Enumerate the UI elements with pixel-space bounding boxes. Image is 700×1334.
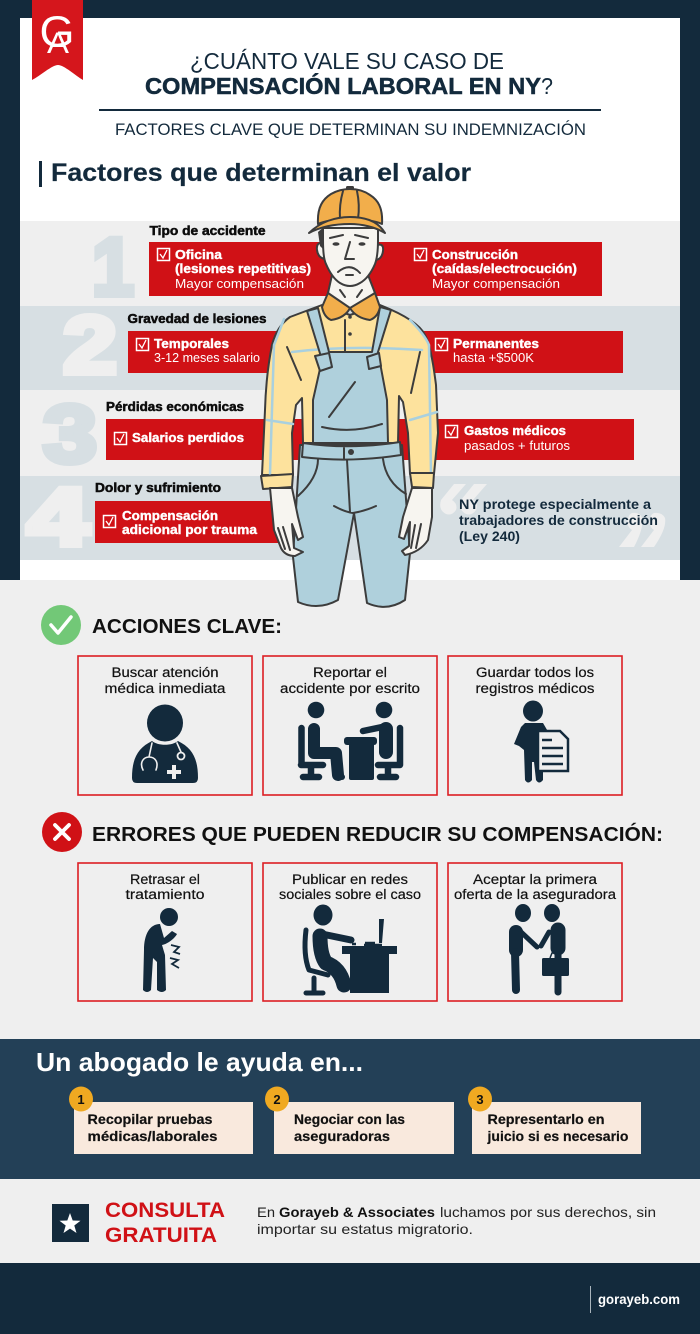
- section heading: factores: Factores que determinan el valor: [51, 159, 471, 187]
- factor 2: gravedad de lesiones: Gravedad de lesiones: [128, 312, 267, 326]
- step 3: 3: [476, 1092, 484, 1107]
- text: gorayeb and associates: Gorayeb & Associates: [279, 1204, 435, 1220]
- icon: closing quotation mark: [619, 513, 665, 547]
- logo ribbon: G: [40, 8, 74, 56]
- action card: atención médica: Buscar atención: [112, 665, 218, 680]
- callout: ley 240: [459, 497, 658, 544]
- error card: redes sociales: sociales sobre el caso: [279, 887, 421, 902]
- factor 2: gravedad de lesiones: [128, 312, 623, 373]
- big number 3: 3: [43, 389, 97, 480]
- factor 1: tipo de accidente: (lesiones repetitivas): [175, 261, 311, 276]
- callout: ley 240: NY protege especialmente a: [459, 497, 652, 512]
- action card: reportar accidente: [263, 656, 437, 795]
- big number 1: 1: [92, 222, 134, 313]
- icon: opening quotation mark: [440, 484, 487, 514]
- error card: retrasar tratamiento: tratamiento: [126, 887, 204, 902]
- callout: ley 240: trabajadores de construcción: [459, 513, 658, 528]
- big number 4: 4: [27, 472, 90, 563]
- factor 1: tipo de accidente: Construcción: [432, 247, 518, 262]
- heading: acciones clave: ACCIONES CLAVE:: [92, 616, 282, 638]
- illustration: injured construction worker: [261, 186, 438, 607]
- step 2: Negociar con las: [294, 1112, 405, 1127]
- factor 2: gravedad de lesiones: 3-12 meses salario: [154, 350, 260, 365]
- action card: registros médicos: Guardar todos los: [476, 665, 594, 680]
- text: gorayeb and associates: luchamos por sus derechos, sin: [440, 1204, 656, 1220]
- heading: consulta gratuita: CONSULTA: [105, 1199, 225, 1222]
- title: ¿CUÁNTO VALE SU CASO DE: [190, 48, 504, 74]
- text: gorayeb and associates: importar su estatus migratorio.: [257, 1221, 473, 1237]
- factor 1: tipo de accidente: Tipo de accidente: [150, 224, 266, 238]
- step 3: [468, 1086, 641, 1154]
- footer: [0, 1263, 700, 1334]
- title: [145, 48, 553, 99]
- heading: consulta gratuita: GRATUITA: [105, 1224, 217, 1247]
- action card: reportar accidente: accidente por escrito: [280, 681, 420, 696]
- action card: reportar accidente: Reportar el: [313, 665, 387, 680]
- logo ribbon: A: [47, 27, 69, 60]
- factor 2: gravedad de lesiones: Permanentes: [453, 336, 539, 351]
- footer: gorayeb.com: [598, 1292, 680, 1307]
- action card: atención médica: [78, 656, 252, 795]
- heading: un abogado le ayuda: Un abogado le ayuda en...: [36, 1047, 363, 1077]
- step 2: [265, 1086, 454, 1154]
- action card: registros médicos: [448, 656, 622, 795]
- action card: atención médica: médica inmediata: [104, 681, 226, 696]
- factor 3: pérdidas económicas: [106, 400, 634, 460]
- error card: retrasar tratamiento: Retrasar el: [130, 872, 200, 887]
- step 3: juicio si es necesario: [486, 1129, 628, 1144]
- factor 4: dolor y sufrimiento: Compensación: [122, 508, 218, 523]
- action card: registros médicos: registros médicos: [476, 681, 595, 696]
- error card: primera oferta: oferta de la aseguradora: [454, 887, 617, 902]
- factor 1: tipo de accidente: Oficina: [175, 247, 223, 262]
- error card: primera oferta: Aceptar la primera: [473, 872, 598, 887]
- error card: redes sociales: Publicar en redes: [292, 872, 408, 887]
- title: COMPENSACIÓN LABORAL EN NY: [145, 72, 541, 99]
- big number 2: 2: [63, 300, 117, 391]
- subtitle: FACTORES CLAVE QUE DETERMINAN SU INDEMNIZACIÓN: [115, 120, 586, 139]
- factor 1: tipo de accidente: (caídas/electrocución): [432, 261, 577, 276]
- factor 1: tipo de accidente: Mayor compensación: [432, 276, 560, 291]
- factor 3: pérdidas económicas: Pérdidas económicas: [106, 400, 244, 414]
- factor 3: pérdidas económicas: Salarios perdidos: [132, 430, 244, 445]
- heading: consulta gratuita: [105, 1199, 225, 1247]
- step 2: 2: [273, 1092, 281, 1107]
- factor 3: pérdidas económicas: pasados + futuros: [464, 438, 570, 453]
- factor bands: [20, 221, 680, 560]
- logo ribbon: [32, 0, 83, 80]
- heading: errores: ERRORES QUE PUEDEN REDUCIR SU COMPENSACIÓN:: [92, 822, 663, 846]
- error card: primera oferta: [448, 863, 622, 1001]
- factor 1: tipo de accidente: Mayor compensación: [175, 276, 304, 291]
- factor 4: dolor y sufrimiento: [95, 481, 285, 543]
- step 3: Representarlo en: [488, 1112, 604, 1127]
- text: gorayeb and associates: [257, 1204, 656, 1237]
- factor 3: pérdidas económicas: Gastos médicos: [464, 423, 566, 438]
- icon: star box: [52, 1204, 89, 1242]
- step 1: Recopilar pruebas: [88, 1112, 212, 1127]
- error card: retrasar tratamiento: [78, 863, 252, 1001]
- step 1: médicas/laborales: [88, 1129, 218, 1144]
- title: ?: [541, 73, 553, 99]
- callout: ley 240: (Ley 240): [459, 529, 520, 544]
- header panel: [0, 0, 700, 580]
- check badge: [41, 605, 81, 645]
- factor 1: tipo de accidente: [149, 224, 602, 296]
- error card: redes sociales: [263, 863, 437, 1001]
- step 1: 1: [77, 1092, 85, 1107]
- step 1: [69, 1086, 253, 1154]
- factor 4: dolor y sufrimiento: Dolor y sufrimiento: [95, 481, 221, 495]
- text: gorayeb and associates: En: [257, 1204, 275, 1220]
- step 2: aseguradoras: [294, 1129, 390, 1144]
- factor 4: dolor y sufrimiento: adicional por trauma: [122, 522, 258, 537]
- error badge: [42, 812, 82, 852]
- factor 2: gravedad de lesiones: Temporales: [154, 336, 229, 351]
- panel: abogado: [0, 1039, 700, 1179]
- factor 2: gravedad de lesiones: hasta +$500K: [453, 350, 534, 365]
